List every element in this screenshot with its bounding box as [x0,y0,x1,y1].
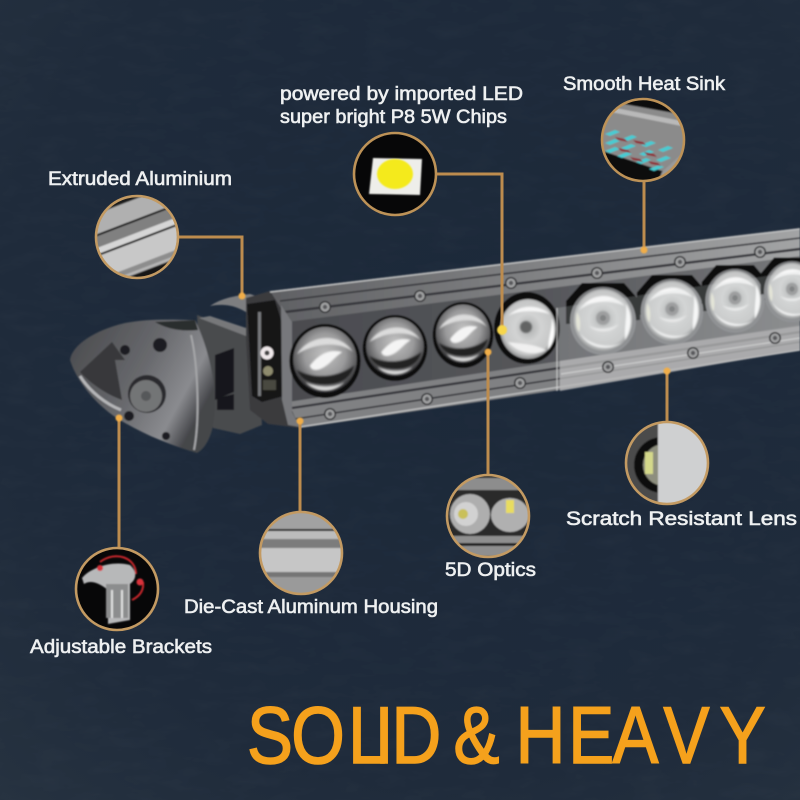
label: 5D optics: 5D Optics [445,560,536,581]
callout: scratch resistant lens [624,420,712,510]
bare lens 4 [494,292,560,364]
front flange [281,305,300,427]
rear heat sink fin [210,294,262,312]
callout: extruded aluminium [94,194,180,280]
dark lens 3 [433,302,493,368]
label: heat sink: Smooth Heat Sink [563,74,726,95]
label: scratch resistant lens: Scratch Resistant Lens [566,509,797,530]
bracket [70,320,215,453]
cover front strip [560,326,800,391]
cover ribs [557,308,800,391]
callout dots [116,246,670,424]
top heat sink strip [270,228,800,322]
label: LED chips: powered by imported LED [280,84,523,105]
scratch resistant cover [557,271,800,391]
highlight edges [270,229,800,427]
dark lens 1 [289,324,361,398]
connector pcb [258,312,276,396]
covered lens 8 [761,258,800,322]
bottom housing strip [288,325,800,428]
dark lens 2 [363,315,427,381]
callout: adjustable brackets [76,548,158,630]
bracket slots [215,348,234,410]
covered lens 6 [637,275,707,345]
covered lens 7 [702,265,768,333]
callout: LED chip [354,133,436,215]
screws [319,246,781,420]
covered lens 5 [566,283,640,355]
lenses [289,258,800,398]
label: LED chips: super bright P8 5W Chips [280,107,507,128]
plate top strip [199,316,246,336]
label: die-cast housing: Die-Cast Aluminum Housing [184,597,438,618]
callout: 5D optics [445,473,533,561]
label: LED chips [280,84,523,128]
callout lines [119,174,667,548]
label: adjustable brackets: Adjustable Brackets [30,637,212,658]
bar body [246,228,800,428]
label: extruded aluminium: Extruded Aluminium [48,169,232,190]
middle lens channel [287,256,800,404]
mounting plate behind bracket [197,315,262,434]
grooves [280,238,800,419]
headline: SOLID & HEAVY [247,690,766,780]
LED light bar [70,228,800,453]
open end cap [247,300,284,402]
callout: heat sink [600,98,686,182]
callout: die-cast housing [255,510,347,597]
